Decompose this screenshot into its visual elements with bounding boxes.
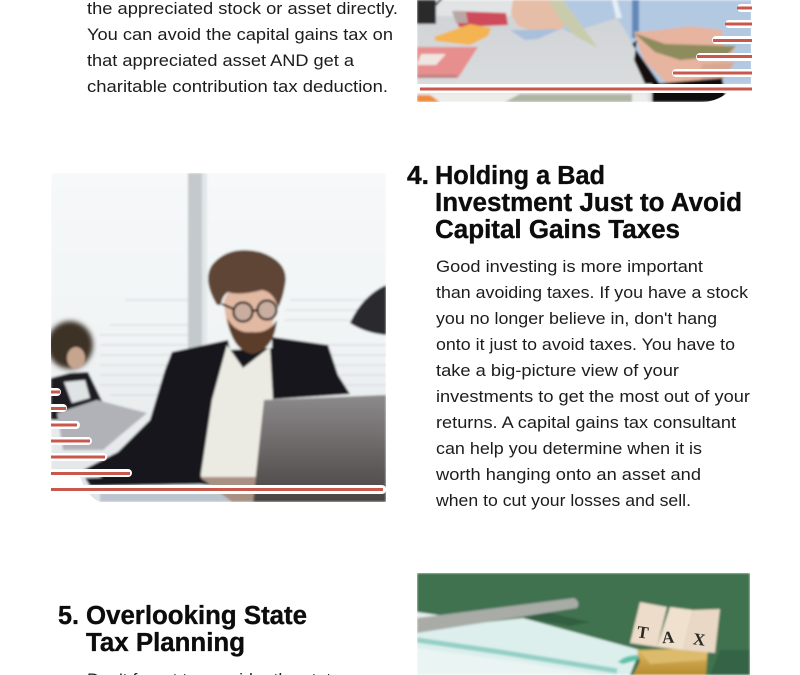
section 4: body text: can help you determine when it is [436,440,702,458]
TAX block letters: X [692,629,707,650]
section 4: heading: Capital Gains Taxes [435,216,680,244]
section 4: body text: you no longer believe in, don't hang [436,310,717,328]
blurred colleague [47,321,104,420]
man body [83,337,350,490]
photo: TAX blocks on a stack of coins [417,573,750,675]
section 3: body text: charitable contribution tax deduction. [87,78,388,96]
section 5: heading [58,602,307,657]
section 4: heading: Holding a Bad [435,162,605,190]
section 4: body text: when to cut your losses and sell. [435,492,691,510]
photo: man in glasses at a laptop [47,173,387,502]
section 3: body text: the appreciated stock or asset directly. [87,0,398,18]
man head [208,250,286,354]
section 3: body text [87,0,398,96]
section 4: body text: investments to get the most out of your [436,388,751,406]
section 4: body text: onto it just to avoid taxes. You have to [436,336,735,354]
section 4: heading: 4. [407,162,429,190]
window column [188,173,207,351]
section 5: heading: Tax Planning [86,629,245,657]
decorative stripes over photo [417,4,752,93]
section 3: body text: You can avoid the capital gains tax on [87,26,393,44]
section 4: heading: Investment Just to Avoid [435,189,742,217]
window blinds [100,300,386,395]
section 4: heading [407,162,742,244]
section 5: heading: 5. [58,602,79,630]
TAX block letters [638,626,706,646]
TAX block letters: A [661,628,675,647]
section 4: body text: take a big-picture view of your [436,362,680,380]
desk lamp [350,285,386,335]
decorative stripes over photo [51,388,387,494]
section 4: body text: worth hanging onto an asset and [435,466,701,484]
section 4: body text: than avoiding taxes. If you have a stock [436,284,749,302]
section 4: body text: Good investing is more important [436,258,703,276]
papers in hand [57,400,147,450]
section 3: body text: that appreciated asset AND get a [87,52,355,70]
laptop [253,395,386,502]
section 4: body text [435,258,751,510]
section 4: body text: returns. A capital gains tax consultant [436,414,736,432]
photo: hands counting cash at a desk [417,0,752,102]
TAX block letters: T [636,622,650,643]
desk items [85,474,256,502]
section 5: heading: Overlooking State [86,602,307,630]
